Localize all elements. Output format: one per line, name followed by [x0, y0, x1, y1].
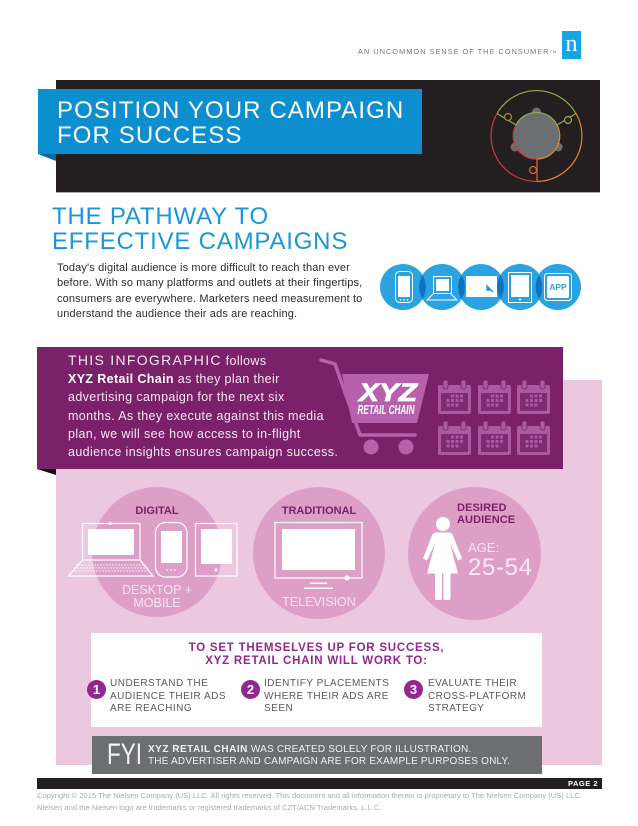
goal 3 — [404, 678, 526, 714]
intro paragraph: Today's digital audience is more difficult to reach than ever — [57, 262, 350, 274]
banner text: XYZ Retail Chain as they plan their — [68, 372, 280, 386]
banner text: plan, we will see how access to in-flight — [68, 427, 301, 441]
circle: traditional: TRADITIONAL — [282, 505, 357, 517]
title ribbon — [38, 89, 422, 154]
banner text: audience insights ensures campaign success. — [68, 445, 338, 459]
goal 1 — [87, 678, 226, 714]
circle: digital: DIGITAL — [135, 505, 179, 517]
logo: n — [566, 31, 578, 57]
goal 2: SEEN — [264, 703, 293, 714]
intro paragraph: consumers are everywhere. Marketers need measurement to — [57, 293, 362, 305]
icon: shopping cart: RETAIL CHAIN — [358, 402, 415, 417]
white goals panel — [91, 633, 542, 727]
goal 1: UNDERSTAND THE — [110, 678, 208, 689]
header banner — [56, 80, 600, 193]
intro paragraph: understand the audience their ads are reaching. — [57, 308, 297, 320]
banner text: THIS INFOGRAPHIC follows — [68, 352, 266, 368]
goal 3: CROSS-PLATFORM — [428, 691, 526, 702]
section heading: EFFECTIVE CAMPAIGNS — [52, 228, 348, 254]
copyright: Copyright © 2015 The Nielsen Company (US) LLC. All rights reserved. This document and all information therein is proprietary to The Nielsen Company (US) LLC. — [37, 791, 582, 800]
goals heading: XYZ RETAIL CHAIN WILL WORK TO: — [205, 654, 428, 666]
circle: desired audience: AUDIENCE — [457, 514, 515, 526]
goal 2: 2 — [247, 682, 254, 697]
FYI box: XYZ RETAIL CHAIN WAS CREATED SOLELY FOR ILLUSTRATION. — [148, 744, 471, 755]
device icon chain: APP — [549, 282, 567, 292]
FYI box: THE ADVERTISER AND CAMPAIGN ARE FOR EXAMPLE PURPOSES ONLY. — [148, 756, 510, 767]
circle: desired audience: DESIRED — [457, 502, 507, 514]
banner text: months. As they execute against this media — [68, 409, 324, 423]
goal 1: AUDIENCE THEIR ADS — [110, 691, 226, 702]
FYI box: FYI — [107, 738, 142, 771]
goals heading — [188, 642, 444, 666]
title — [57, 96, 404, 148]
logo — [562, 31, 581, 59]
goal 3: EVALUATE THEIR — [428, 678, 517, 689]
footer bar: PAGE 2 — [568, 779, 598, 788]
circle: digital: DESKTOP + — [122, 583, 192, 597]
circle: desired audience: AGE: — [468, 540, 499, 555]
goal 1: ARE REACHING — [110, 703, 192, 714]
goal 3: 3 — [410, 682, 417, 697]
circle: desired audience: 25-54 — [468, 554, 532, 581]
banner text: advertising campaign for the next six — [68, 390, 285, 404]
section heading — [52, 203, 348, 254]
FYI box — [92, 736, 542, 774]
footer bar — [37, 778, 602, 789]
copyright — [37, 791, 582, 812]
icon: shopping cart: XYZ — [357, 379, 419, 407]
tagline: AN UNCOMMON SENSE OF THE CONSUMERTM — [358, 47, 557, 56]
goal 3: STRATEGY — [428, 703, 484, 714]
banner text — [68, 352, 338, 459]
copyright: Nielsen and the Nielsen logo are trademarks or registered trademarks of CZT/ACN Trademarks, L.L.C. — [37, 802, 381, 812]
goals heading: TO SET THEMSELVES UP FOR SUCCESS, — [189, 642, 444, 654]
circle: digital: MOBILE — [133, 596, 181, 610]
purple banner — [37, 347, 563, 469]
pink panel — [56, 380, 602, 765]
goal 2: IDENTIFY PLACEMENTS — [264, 678, 389, 689]
circle: traditional: TELEVISION — [282, 595, 356, 609]
section heading: THE PATHWAY TO — [52, 203, 269, 230]
intro paragraph: before. With so many platforms and outlets at their fingertips, — [57, 277, 362, 289]
goal 2: WHERE THEIR ADS ARE — [264, 691, 389, 702]
goal 2 — [241, 678, 389, 714]
intro paragraph — [57, 262, 362, 320]
title: FOR SUCCESS — [57, 122, 242, 148]
goal 1: 1 — [93, 682, 100, 697]
title: POSITION YOUR CAMPAIGN — [57, 96, 404, 124]
